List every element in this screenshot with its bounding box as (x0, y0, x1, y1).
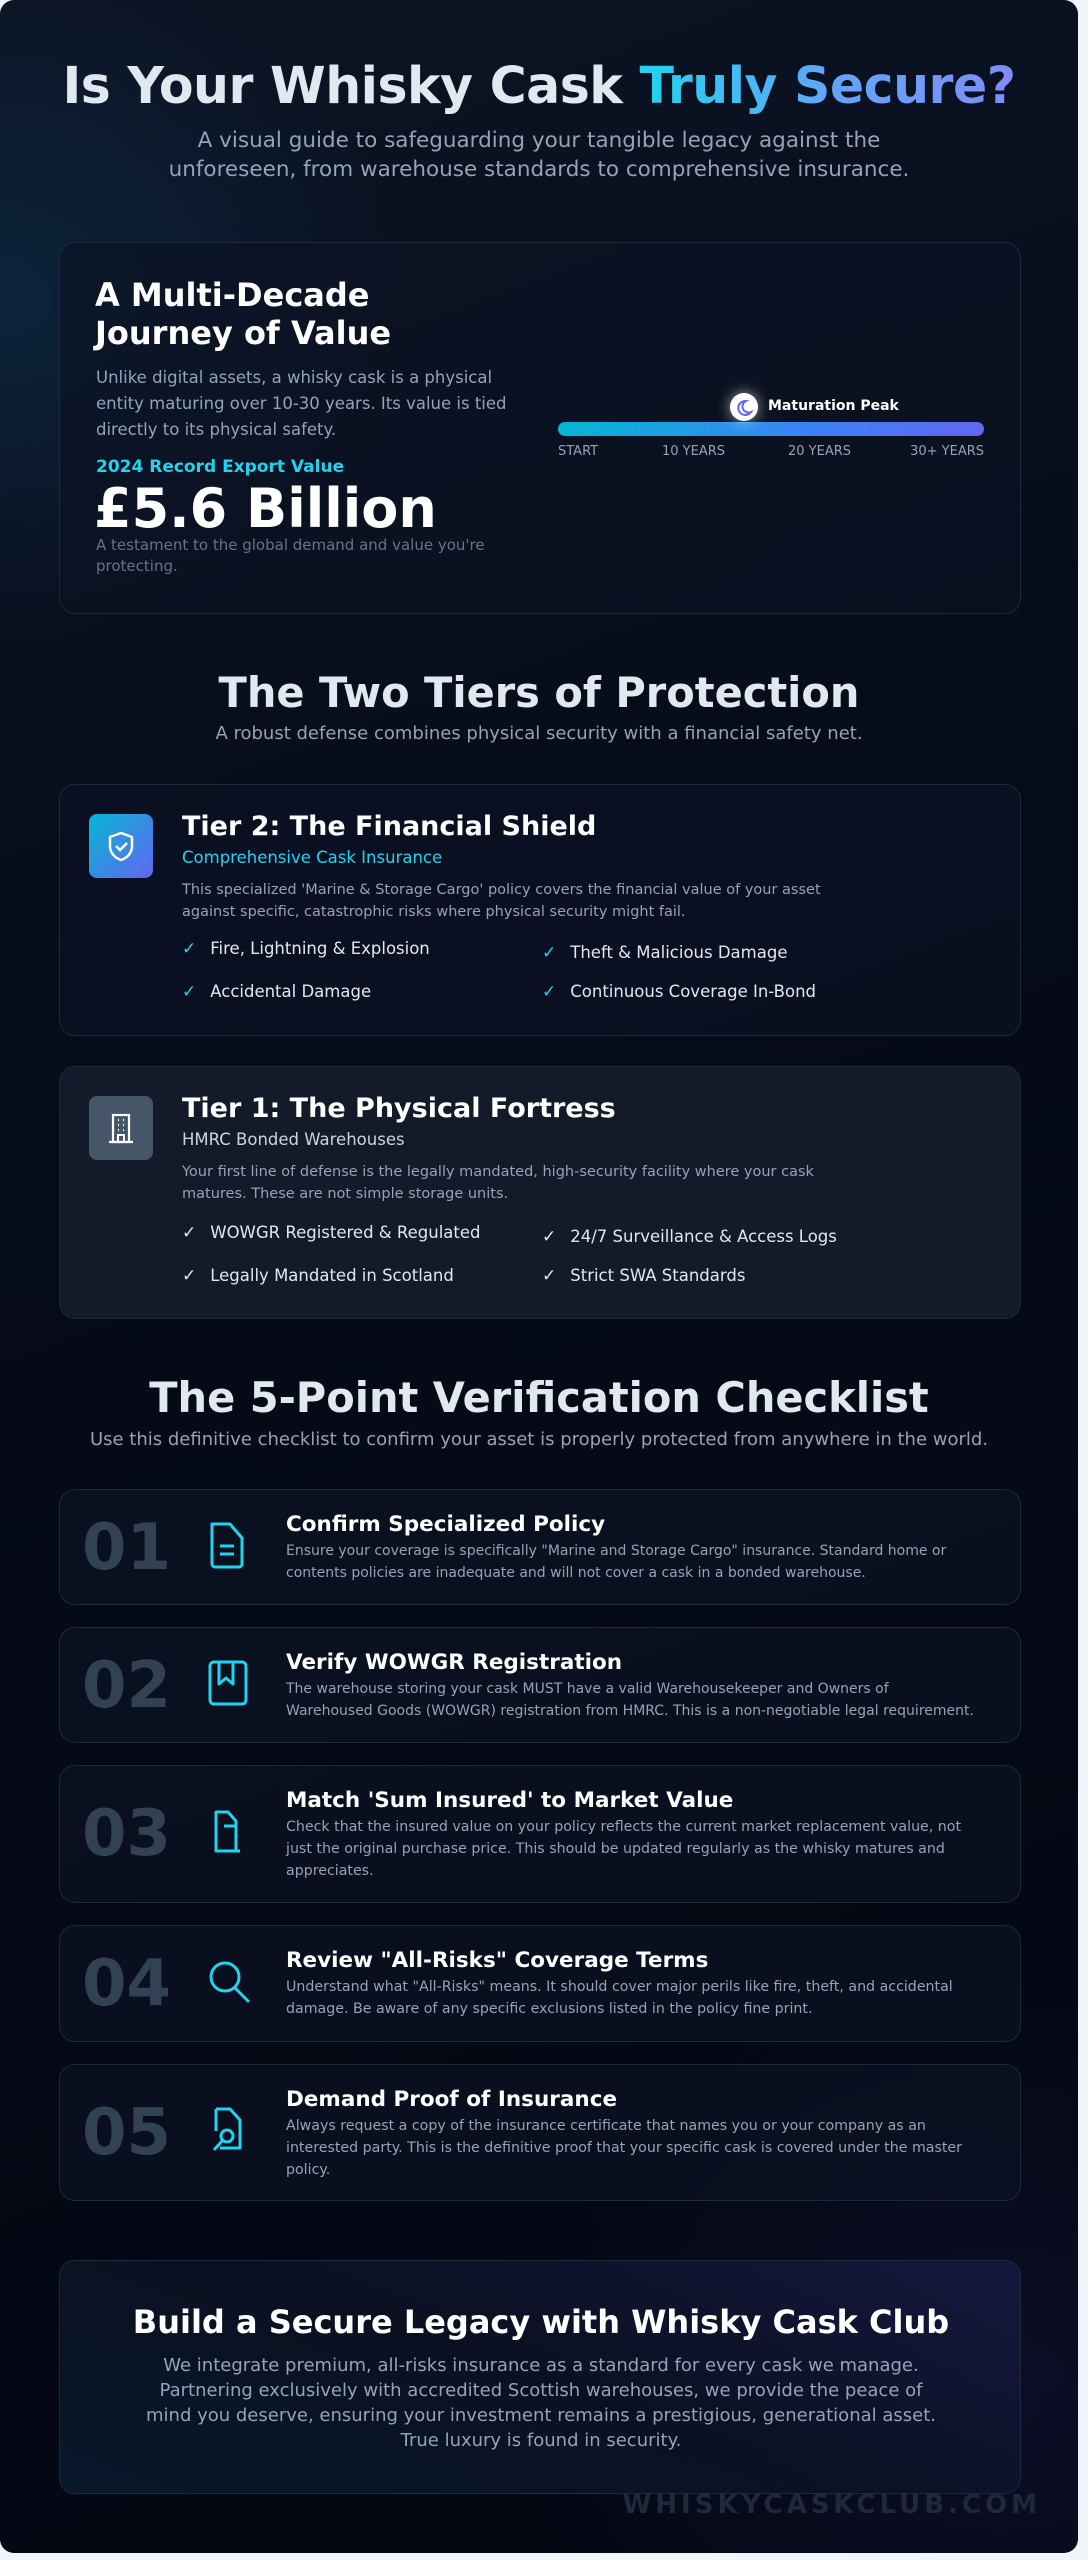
checklist item 03: 03 (82, 1797, 171, 1871)
tier title: Tier 1: The Physical Fortress (182, 1093, 616, 1124)
checklist item 05: 05 (82, 2096, 171, 2170)
heading: A Multi-Decade (95, 276, 369, 314)
text block: Unlike digital assets, a whisky cask is a physical entity maturing over 10-30 years. Its value is tied directly to its physical safety. (96, 368, 507, 439)
checklist item 02: Warehoused Goods (WOWGR) registration from HMRC. This is a non-negotiable legal requirement. (286, 1703, 974, 1719)
checklist item 05: Always request a copy of the insurance certificate that names you or your company as an interested party. This is the definitive proof that your specific cask is covered under the master policy. (286, 2118, 962, 2178)
icon: shield (89, 814, 153, 878)
stat note: A testament to the global demand and value you're protecting. (96, 536, 485, 575)
label: maturation peak: Maturation Peak (768, 398, 899, 414)
title: Is Your Whisky Cask Truly Secure? (62, 56, 1016, 115)
stat label: 2024 Record Export Value (96, 457, 344, 477)
checklist item 03: Match 'Sum Insured' to Market Value (286, 1788, 733, 1813)
icon: file (214, 1810, 240, 1852)
checklist item 01 (59, 1489, 1021, 1605)
stat value: £5.6 Billion (94, 477, 437, 540)
subheading: A robust defense combines physical security with a financial safety net. (215, 723, 863, 744)
checklist item 04: Review "All-Risks" Coverage Terms (286, 1948, 708, 1973)
checklist item 02: 02 (82, 1649, 171, 1723)
checklist: ✓ Theft & Malicious Damage (542, 943, 787, 963)
checklist item 03 (59, 1765, 1021, 1903)
icon: book (208, 1660, 248, 1706)
checklist item 02: Verify WOWGR Registration (286, 1650, 622, 1675)
axis labels (558, 444, 984, 459)
icon: document (210, 1522, 244, 1568)
checklist item 04 (59, 1925, 1021, 2042)
panel: tier 1 (59, 1066, 1021, 1319)
checklist: ✓ 24/7 Surveillance & Access Logs (542, 1227, 837, 1247)
checklist item 05 (59, 2064, 1021, 2201)
checklist item 05: Demand Proof of Insurance (286, 2087, 617, 2112)
checklist: ✓ Legally Mandated in Scotland (182, 1266, 454, 1286)
checklist item 01: 01 (82, 1511, 171, 1585)
subtitle: unforeseen, from warehouse standards to comprehensive insurance. (169, 157, 909, 182)
heading: Journey of Value (95, 314, 391, 352)
checklist (182, 1223, 837, 1286)
panel: tier 2 (59, 784, 1021, 1036)
tier subtitle: Comprehensive Cask Insurance (182, 848, 442, 867)
cta heading: Build a Secure Legacy with Whisky Cask Club (133, 2303, 949, 2341)
checklist: ✓ Accidental Damage (182, 982, 371, 1002)
icon: document search (213, 2108, 242, 2151)
heading (93, 276, 391, 352)
panel: call to action (59, 2260, 1021, 2494)
checklist item 01: Ensure your coverage is specifically "Marine and Storage Cargo" insurance. Standard home or contents policies are inadequate and will not cover a cask in a bonded warehouse. (286, 1543, 946, 1581)
axis labels: 20 YEARS (788, 444, 851, 459)
axis labels: START (558, 444, 598, 459)
checklist item 03: Check that the insured value on your policy reflects the current market replacement value, not just the original purchase price. This should be updated regularly as the whisky matures and appreciates. (286, 1819, 961, 1879)
axis labels: 10 YEARS (662, 444, 725, 459)
checklist item 02 (59, 1627, 1021, 1743)
subtitle: A visual guide to safeguarding your tangible legacy against the (198, 128, 880, 153)
timeline chart (558, 384, 984, 459)
footer brand: WHISKYCASKCLUB.COM (623, 2490, 1041, 2520)
checklist item 01: Confirm Specialized Policy (286, 1512, 605, 1537)
checklist: ✓ Strict SWA Standards (542, 1266, 745, 1286)
icon: maturation peak (730, 393, 758, 421)
checklist item 04: 04 (82, 1947, 171, 2021)
axis labels: 30+ YEARS (910, 444, 984, 459)
timeline bar (558, 422, 984, 436)
checklist: ✓ WOWGR Registered & Regulated (182, 1223, 481, 1243)
icon: building (89, 1096, 153, 1160)
subtitle (169, 128, 909, 182)
tier subtitle: HMRC Bonded Warehouses (182, 1130, 405, 1149)
tier title: Tier 2: The Financial Shield (182, 811, 596, 842)
subheading: Use this definitive checklist to confirm your asset is properly protected from anywhere in the world. (90, 1429, 988, 1450)
checklist: ✓ Fire, Lightning & Explosion (182, 939, 430, 959)
checklist item 04: Understand what "All-Risks" means. It should cover major perils like fire, theft, and accidental damage. Be aware of any specific exclusions listed in the policy fine print. (286, 1979, 953, 2017)
checklist item 02: The warehouse storing your cask MUST have a valid Warehousekeeper and Owners of (286, 1681, 889, 1697)
heading: checklist: The 5-Point Verification Checklist (149, 1373, 929, 1422)
description: Your first line of defense is the legally mandated, high-security facility where your cask matures. These are not simple storage units. (182, 1164, 814, 1202)
checklist (182, 939, 816, 1002)
description: This specialized 'Marine & Storage Cargo' policy covers the financial value of your asset against specific, catastrophic risks where physical security might fail. (182, 882, 821, 920)
heading: two tiers: The Two Tiers of Protection (219, 668, 859, 717)
icon: magnifier (210, 1962, 250, 2003)
panel: journey of value (59, 242, 1021, 614)
checklist: ✓ Continuous Coverage In-Bond (542, 982, 816, 1002)
cta text: We integrate premium, all-risks insurance as a standard for every cask we manage. Partnering exclusively with accredited Scottish warehouses, we provide the peace of mind you deserve, ensuring your investment remains a prestigious, generational asset. True luxury is found in security. (146, 2355, 936, 2451)
